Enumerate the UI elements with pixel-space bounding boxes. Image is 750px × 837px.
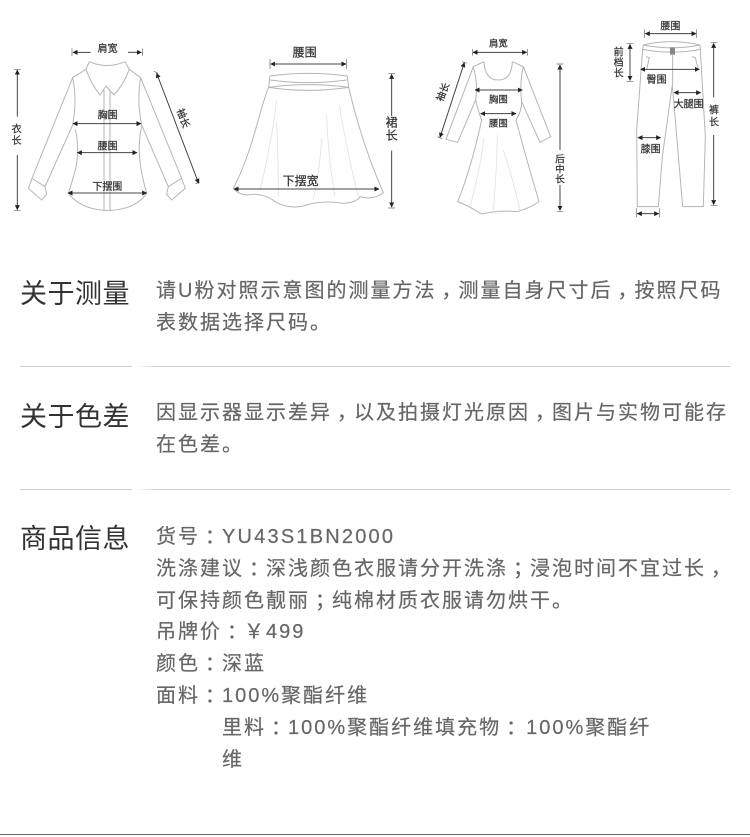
- diagram: skirt: [233, 46, 398, 208]
- diagram: skirt: 腰围: [293, 46, 317, 60]
- text: measurement instructions: 请U粉对照示意图的测量方法，测量自身尺寸后，按照尺码: [156, 280, 722, 302]
- diagram: trousers: 裤: [709, 103, 719, 116]
- section: about measurement: [20, 279, 722, 334]
- diagram: dress: 胸围: [489, 94, 508, 105]
- section: about colour difference: [20, 402, 728, 456]
- diagram: trousers: 膝围: [641, 142, 661, 155]
- text: product details: 维: [222, 749, 244, 771]
- text: product details: 里料：100%聚酯纤维填充物：100%聚酯纤: [222, 717, 651, 739]
- text: product details: 货号：YU43S1BN2000: [156, 526, 395, 548]
- diagram: shirt: 腰围: [98, 140, 118, 152]
- diagram: trousers: 长: [709, 116, 719, 128]
- diagram: trousers: 档: [614, 56, 624, 69]
- text: measurement instructions: 表数据选择尺码。: [156, 312, 332, 334]
- diagram: trousers: [614, 20, 719, 217]
- diagram: trousers: 臀围: [647, 74, 667, 86]
- diagram: shirt: [12, 42, 200, 210]
- text: product details: 洗涤建议：深浅颜色衣服请分开洗涤；浸泡时间不宜过长，: [156, 558, 733, 580]
- diagram: shirt: 衣: [12, 123, 22, 136]
- diagram: skirt: 裙: [386, 116, 398, 130]
- diagram: dress: 中: [555, 164, 565, 176]
- diagram: dress: 肩宽: [489, 38, 508, 49]
- text: colour difference note: 因显示器显示差异，以及拍摄灯光原因，图片与实物可能存: [156, 402, 728, 424]
- diagram: dress: 腰围: [489, 119, 508, 129]
- text: measurement instructions: [156, 280, 722, 334]
- text: product details: 吊牌价：￥499: [156, 621, 305, 643]
- text: product details: [156, 526, 733, 771]
- diagram: skirt: 长: [386, 128, 398, 142]
- diagram: dress: 袖长: [434, 81, 453, 103]
- heading: about measurement: 关于测量: [20, 279, 130, 309]
- diagram: skirt: 下摆宽: [283, 173, 319, 188]
- diagram: shirt: 下摆围: [92, 180, 122, 193]
- heading: product information: 商品信息: [20, 524, 130, 554]
- diagram: trousers: 长: [614, 68, 624, 80]
- diagram: trousers: 前: [614, 45, 624, 58]
- text: colour difference note: 在色差。: [156, 434, 244, 456]
- section: product information: [20, 524, 733, 771]
- text: colour difference note: [156, 402, 728, 456]
- text: product details: 颜色：深蓝: [156, 653, 266, 675]
- diagram: dress: [434, 38, 565, 214]
- diagram: shirt: 肩宽: [98, 42, 118, 55]
- diagram: shirt: 长: [12, 135, 22, 147]
- diagram: shirt: 胸围: [98, 109, 118, 122]
- text: product details: 面料：100%聚酯纤维: [156, 685, 369, 707]
- diagram: shirt: 袖长: [174, 107, 193, 130]
- text: product details: 可保持颜色靓丽；纯棉材质衣服请勿烘干。: [156, 590, 574, 612]
- diagram: dress: 长: [555, 174, 565, 186]
- measurement diagrams: [12, 20, 719, 218]
- diagram: dress: 后: [555, 155, 565, 166]
- diagram: trousers: 大腿围: [674, 98, 704, 111]
- diagram: trousers: 腰围: [660, 20, 680, 32]
- heading: about colour difference: 关于色差: [20, 402, 130, 432]
